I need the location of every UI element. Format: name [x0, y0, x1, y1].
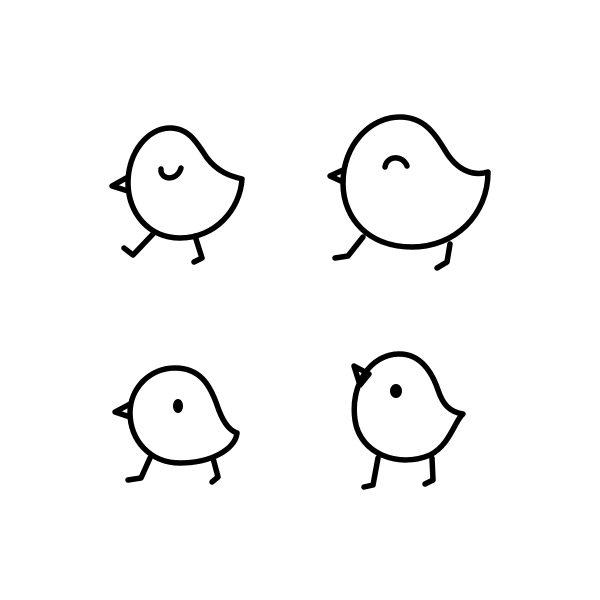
- bird 4: dot eye, looking up: [354, 354, 463, 487]
- bird 2: walking, smiling eye: [330, 117, 488, 268]
- bird 1: walking, eyes closed: [112, 128, 242, 262]
- bird 3: dot eye: [115, 368, 237, 482]
